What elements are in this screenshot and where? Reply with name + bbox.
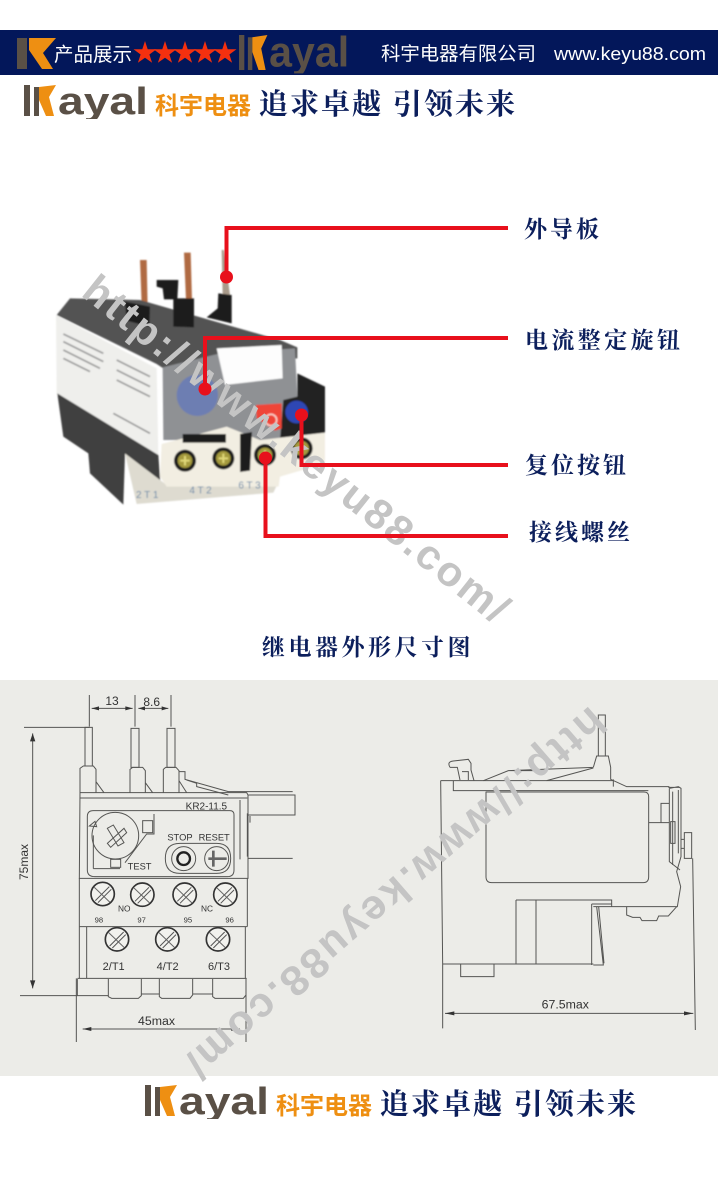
slogan part two: 引领未来 (393, 88, 517, 121)
header banner (0, 29, 718, 77)
upper terminal row: 97 (137, 915, 146, 924)
Kayal logo (24, 85, 145, 119)
housing outline (441, 779, 648, 1028)
side pin (593, 715, 669, 787)
dimension 75max: 75max (17, 844, 31, 880)
base (77, 979, 246, 998)
terminal numbers: 6 T 3 (238, 481, 261, 492)
control recess: TEST (128, 861, 152, 871)
slogan: 追求卓越 (259, 88, 383, 121)
label: reset button: 复位按钮 (525, 453, 629, 478)
slogan part two: 引领未来 (514, 1088, 638, 1121)
slogan: 追求卓越 (380, 1088, 504, 1121)
terminal numbers: 2 T 1 (136, 490, 159, 501)
control recess (87, 811, 234, 877)
banner Kayal logo: ayal (269, 29, 349, 77)
white nameplate (217, 345, 283, 385)
dimension 75max (17, 727, 89, 996)
side label (56, 315, 158, 456)
banner label: 产品展示 (54, 44, 132, 66)
leader: outer guide plate (220, 228, 508, 284)
front view drawing (17, 694, 295, 1042)
label: outer guide plate: 外导板 (524, 217, 602, 242)
terminal cover lower (125, 453, 279, 504)
lower terminal row: 4/T2 (157, 961, 179, 973)
terminal screws (174, 437, 313, 472)
upper terminal row: NO (118, 903, 131, 913)
brand name: 科宇电器 (155, 93, 251, 120)
upper terminal row (79, 878, 247, 927)
product photo: thermal relay (56, 250, 325, 505)
right dark block (280, 373, 325, 440)
upper terminal row: 96 (225, 915, 234, 924)
upper housing (79, 793, 295, 878)
dimension 67.5max: 67.5max (542, 997, 590, 1011)
side view drawing (441, 715, 695, 1030)
label: terminal screw: 接线螺丝 (529, 520, 633, 545)
dimension 67.5max (445, 997, 693, 1015)
leader: reset button (295, 408, 508, 465)
side label fine print (63, 334, 150, 433)
terminal numbers: 4 T 2 (189, 485, 212, 496)
dimension 45max (76, 978, 246, 1042)
company name: 科宇电器有限公司 (381, 43, 536, 65)
website: www.keyu88.com (553, 43, 706, 64)
upper terminal row: NC (201, 903, 213, 913)
front panel (163, 348, 297, 440)
Kayal logo: ayal (58, 81, 148, 123)
Kayal logo (145, 1085, 266, 1119)
top ridges (483, 767, 593, 781)
dimension 13 and 8.6: 13 (105, 694, 119, 708)
upper terminal row: 95 (184, 915, 192, 924)
top brand row (24, 85, 514, 119)
terminal cover (160, 427, 325, 487)
terminal posts (125, 280, 232, 327)
adjustment dial (177, 375, 218, 416)
reset knob (285, 401, 308, 423)
reset tab (681, 833, 695, 1030)
inner chamber (486, 792, 649, 883)
upper housing: KR2-11.5 (186, 801, 228, 812)
icon: K mark (17, 38, 56, 69)
top clip (449, 759, 474, 781)
lower terminal row (77, 927, 247, 978)
dimension 45max: 45max (138, 1014, 176, 1028)
lower side housing (57, 393, 161, 505)
five star rating (134, 41, 236, 63)
control recess: RESET (199, 833, 230, 843)
rail clip (461, 964, 494, 977)
dark slot (240, 432, 252, 472)
bottom brand row (145, 1085, 636, 1119)
red stop button (256, 403, 282, 431)
label: current dial: 电流整定旋钮 (525, 328, 683, 353)
control recess: STOP (167, 833, 193, 843)
foot (627, 907, 677, 921)
terminal numbers (136, 481, 261, 501)
watermark: upper: http://www.keyu88.com/ (74, 265, 519, 632)
Kayal logo: ayal (179, 1081, 269, 1123)
leader: current dial (198, 338, 508, 396)
banner Kayal logo (239, 35, 346, 74)
lower terminal row: 6/T3 (208, 961, 230, 973)
lower block (516, 900, 612, 965)
panel: dimension drawing (0, 680, 718, 1076)
brand name: 科宇电器 (276, 1093, 372, 1120)
right profile (593, 787, 681, 907)
dimension 13 and 8.6: 8.6 (143, 695, 160, 709)
slider (183, 434, 226, 443)
body top (57, 298, 297, 368)
pins and posts (80, 727, 293, 795)
copper pins (140, 250, 230, 308)
watermark: lower, inverted: http://www.keyu88.com/ (176, 698, 615, 1088)
dimension 13 and 8.6 (89, 694, 171, 727)
lower terminal row: 2/T1 (103, 961, 125, 973)
drawing caption: 继电器外形尺寸图 (262, 635, 474, 660)
upper terminal row: 98 (95, 915, 103, 924)
leader: terminal screw (259, 452, 508, 536)
